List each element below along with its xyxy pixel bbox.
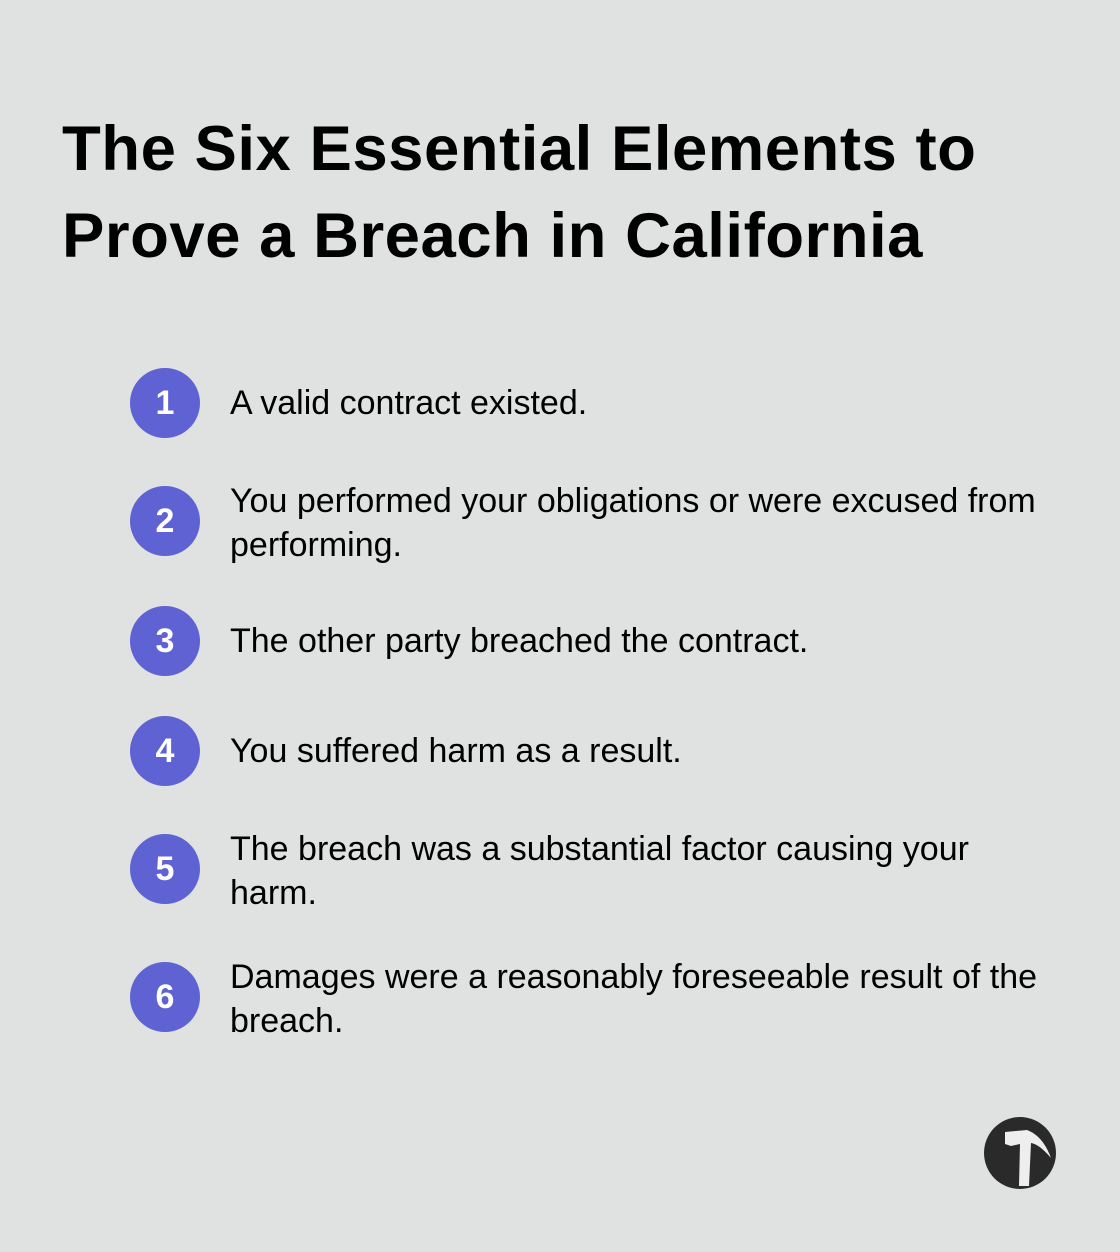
- item 6: 6: [156, 978, 174, 1016]
- item 4: 4: [156, 732, 174, 770]
- title: The Six Essential Elements to: [62, 114, 976, 184]
- title: Prove a Breach in California: [62, 201, 923, 271]
- item 3: The other party breached the contract.: [230, 622, 808, 660]
- item 5: 5: [156, 850, 174, 888]
- item 2: You performed your obligations or were excused from performing.: [230, 482, 1036, 564]
- item 1: A valid contract existed.: [230, 384, 587, 422]
- item 5: The breach was a substantial factor causing your harm.: [230, 830, 969, 912]
- item 3: 3: [156, 622, 174, 660]
- item 3: [130, 606, 808, 676]
- title: [62, 114, 976, 271]
- item 4: You suffered harm as a result.: [230, 732, 682, 770]
- item 1: [130, 368, 587, 438]
- icon: hammer logo: [984, 1117, 1056, 1189]
- item 2: 2: [156, 502, 174, 540]
- item 6: Damages were a reasonably foreseeable result of the breach.: [230, 958, 1037, 1040]
- item 1: 1: [156, 384, 174, 422]
- item 4: [130, 716, 682, 786]
